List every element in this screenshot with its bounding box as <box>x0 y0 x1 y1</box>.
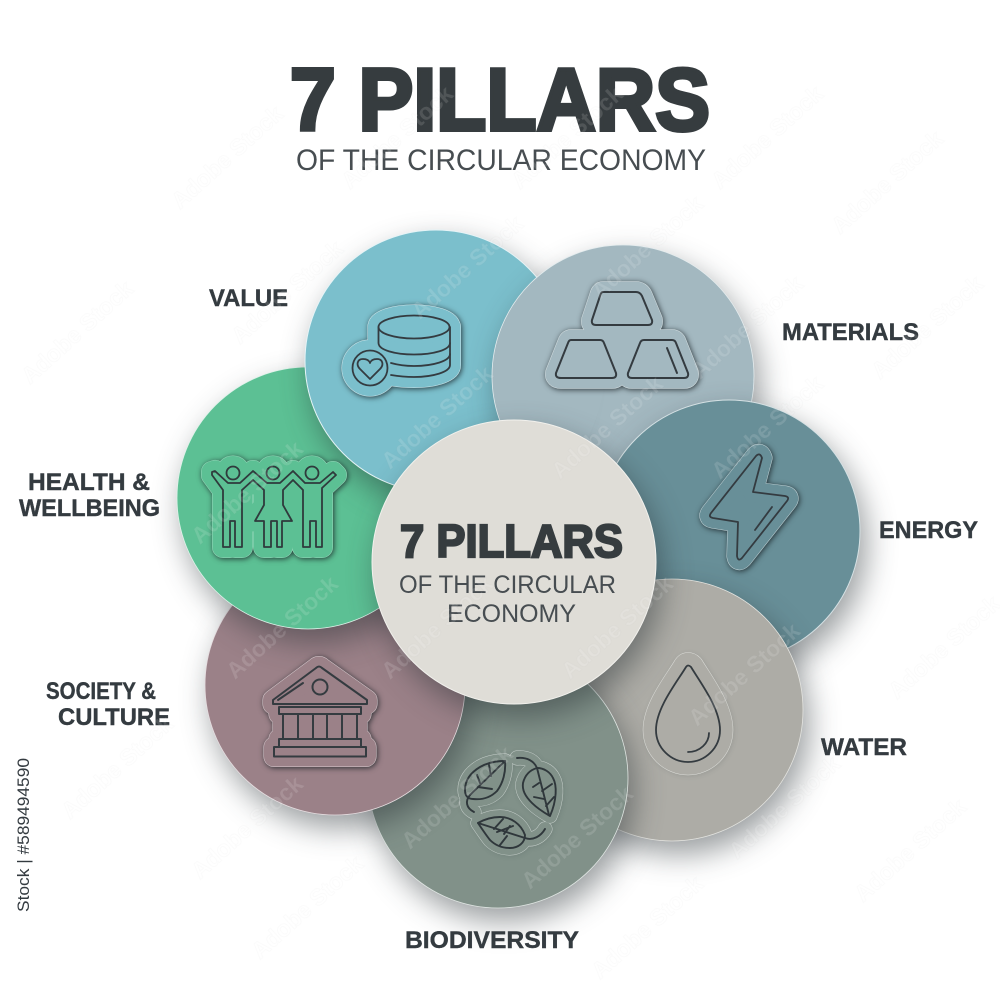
watermark pattern: Adobe Stock <box>586 870 708 984</box>
stock id text: Stock | #589494590 <box>15 758 33 912</box>
watermark pattern: Adobe Stock <box>376 360 498 474</box>
label: society and culture: CULTURE <box>58 704 170 731</box>
circle: society and culture <box>205 555 465 815</box>
watermark pattern: Adobe Stock <box>166 100 288 214</box>
icon: classical building (society and culture) <box>273 666 367 756</box>
circle: health and wellbeing <box>177 367 439 629</box>
watermark pattern: Adobe Stock <box>186 435 308 549</box>
watermark pattern: Adobe Stock <box>686 270 808 384</box>
watermark pattern: Adobe Stock <box>506 80 628 194</box>
label: society and culture <box>46 678 170 731</box>
watermark pattern: Adobe Stock <box>849 793 971 907</box>
centre text <box>399 515 623 628</box>
watermark pattern: Adobe Stock <box>186 770 308 884</box>
watermark pattern: Adobe Stock <box>336 80 458 194</box>
circle: biodiversity <box>368 648 628 908</box>
label: society and culture: SOCIETY & <box>46 678 156 705</box>
watermark pattern: Adobe Stock <box>546 370 668 484</box>
watermark pattern: Adobe Stock <box>226 235 348 349</box>
label: value: VALUE <box>209 285 288 312</box>
materials overlap on value <box>492 268 589 433</box>
watermark pattern: Adobe Stock <box>586 190 708 304</box>
watermark pattern: Adobe Stock <box>56 710 178 824</box>
label: materials: MATERIALS <box>782 319 919 346</box>
title: 7 PILLARS <box>290 50 710 149</box>
icon: three people (health and wellbeing) <box>212 466 336 547</box>
centre subtitle line 1: OF THE CIRCULAR <box>399 571 616 599</box>
label: energy: ENERGY <box>879 517 978 544</box>
label: health and wellbeing: WELLBEING <box>19 495 160 522</box>
watermark pattern: Adobe Stock <box>683 617 805 731</box>
icon: lightning bolt (energy) <box>710 454 788 560</box>
circle diagram <box>177 230 860 908</box>
circle: materials <box>492 245 754 507</box>
watermark pattern: Adobe Stock <box>396 740 518 854</box>
centre heading: 7 PILLARS <box>400 515 623 567</box>
watermark pattern: Adobe Stock <box>406 210 528 324</box>
watermark pattern: Adobe Stock <box>16 275 138 389</box>
icon: recycling leaves (biodiversity) <box>465 758 556 848</box>
watermark pattern: Adobe Stock <box>706 370 828 484</box>
label: biodiversity: BIODIVERSITY <box>405 927 579 954</box>
circle: energy <box>598 400 860 662</box>
watermark pattern: Adobe Stock <box>866 270 988 384</box>
circle: value <box>305 230 567 492</box>
watermark pattern: Adobe Stock <box>826 125 948 239</box>
watermark pattern: Adobe Stock <box>706 80 828 194</box>
icon: gold bars (materials) <box>556 292 688 380</box>
watermark pattern: Adobe Stock <box>516 780 638 894</box>
subtitle: OF THE CIRCULAR ECONOMY <box>296 144 706 177</box>
materials shadow over value <box>481 274 536 422</box>
watermark pattern: Adobe Stock <box>556 570 678 684</box>
centre subtitle line 2: ECONOMY <box>447 600 576 628</box>
watermark pattern: Adobe Stock <box>246 850 368 964</box>
circle: water <box>541 579 803 841</box>
label: health and wellbeing: HEALTH & <box>28 469 150 496</box>
label: water: WATER <box>821 734 907 761</box>
watermark pattern: Adobe Stock <box>376 570 498 684</box>
watermark pattern: Adobe Stock <box>221 570 343 684</box>
icon: coins with heart (value) <box>352 316 450 386</box>
centre circle <box>372 420 656 704</box>
watermark pattern: Adobe Stock <box>723 750 845 864</box>
label: health and wellbeing <box>19 469 160 522</box>
icon: water drop (water) <box>656 666 720 762</box>
